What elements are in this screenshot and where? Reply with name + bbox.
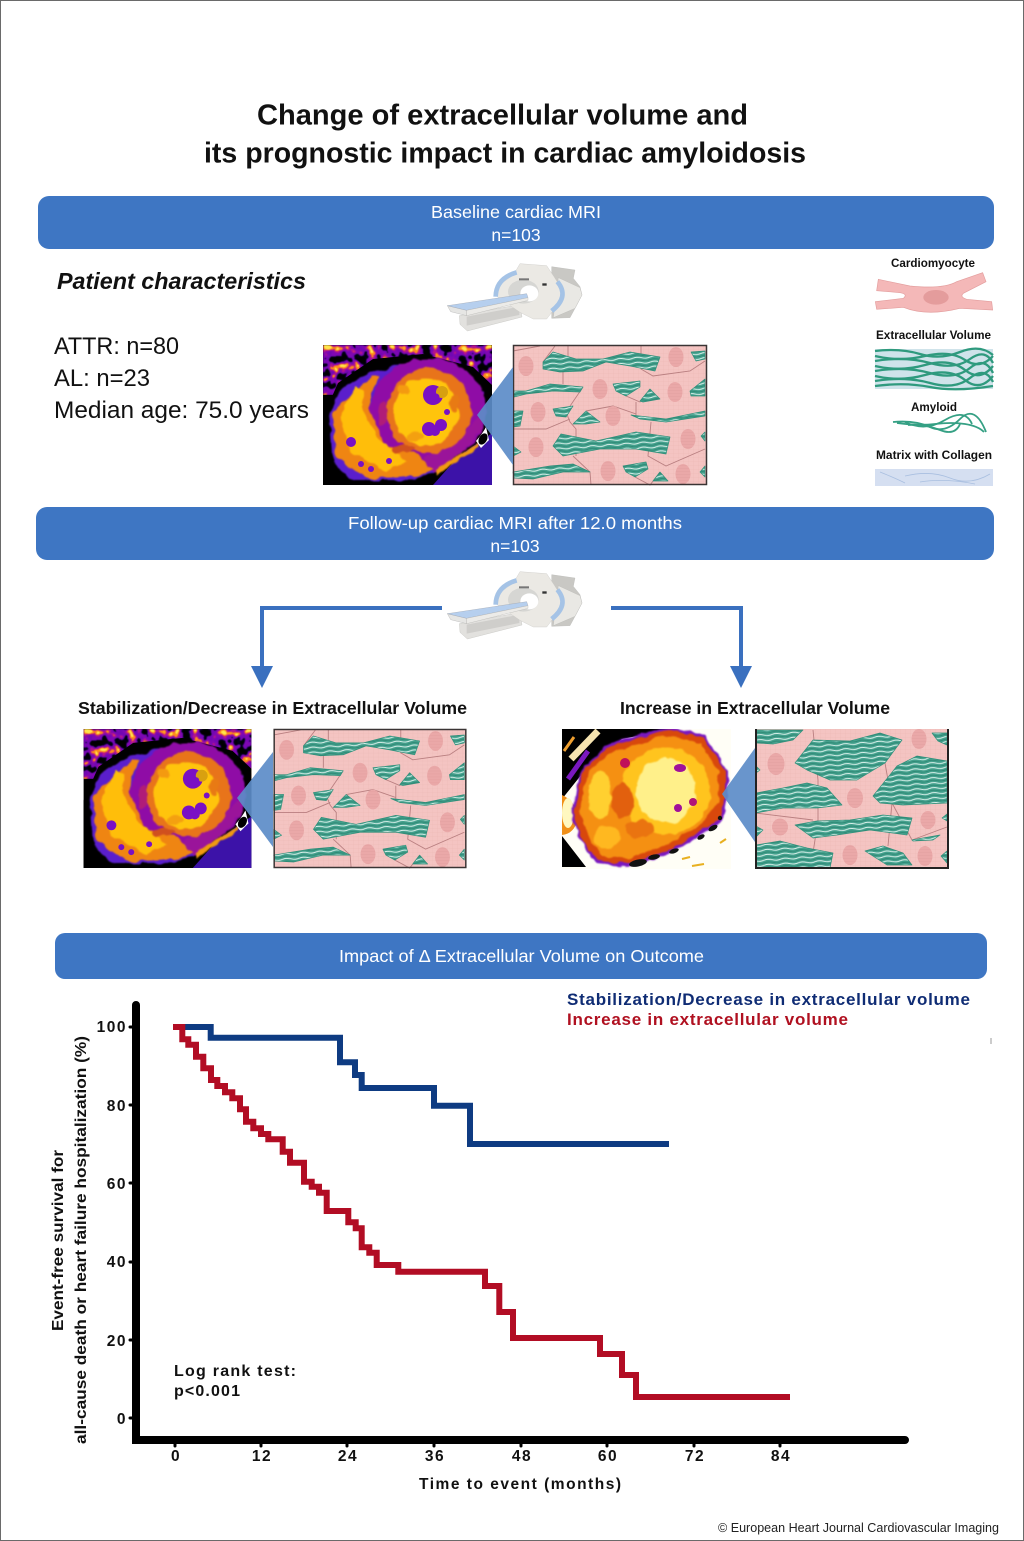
legend item: amyloid: Amyloid xyxy=(911,400,957,414)
zoom wedge baseline xyxy=(477,367,513,465)
title xyxy=(204,100,806,170)
banner: follow-up cardiac MRI xyxy=(36,507,994,560)
y axis tick labels: 20 xyxy=(107,1333,127,1350)
y axis title: Event-free survival for xyxy=(50,1150,67,1331)
heading: increase: Increase in Extracellular Volume xyxy=(620,698,890,718)
banner: follow-up cardiac MRI: n=103 xyxy=(490,536,540,556)
x axis tick labels: 0 xyxy=(171,1448,181,1465)
histology panel increase xyxy=(755,729,949,869)
MRI heart image baseline xyxy=(323,345,492,485)
chart: Kaplan-Meier survival xyxy=(50,990,970,1493)
title: its prognostic impact in cardiac amyloidosis xyxy=(204,138,806,170)
banner: baseline cardiac MRI: Baseline cardiac MRI xyxy=(431,202,601,222)
patient characteristics text: Median age: 75.0 years xyxy=(54,397,309,424)
arrow: to stabilization xyxy=(251,608,442,688)
chart legend xyxy=(567,990,970,1029)
y axis tick labels: 0 xyxy=(117,1411,127,1428)
banner: baseline cardiac MRI xyxy=(38,196,994,249)
heading: stabilization/decrease: Stabilization/Decrease in Extracellular Volume xyxy=(78,698,467,718)
patient characteristics heading: Patient characteristics xyxy=(57,268,306,294)
zoom wedge stabilization xyxy=(237,752,273,847)
y axis tick labels xyxy=(97,1019,127,1428)
banner: impact on outcome xyxy=(55,933,987,979)
y axis tick labels: 80 xyxy=(107,1098,127,1115)
legend item: amyloid xyxy=(893,400,986,432)
x axis tick labels: 60 xyxy=(598,1448,618,1465)
title: Change of extracellular volume and xyxy=(257,100,748,132)
chart legend: Increase in extracellular volume xyxy=(567,1010,848,1029)
histology panel stabilization xyxy=(274,729,466,868)
x axis tick labels: 24 xyxy=(338,1448,358,1465)
legend item: extracellular volume xyxy=(875,328,993,389)
copyright credit: © European Heart Journal Cardiovascular Imaging xyxy=(718,1521,999,1535)
x axis tick labels xyxy=(171,1448,791,1465)
patient characteristics text xyxy=(54,333,309,424)
curve: stabilization/decrease xyxy=(175,1027,669,1144)
arrow: to increase xyxy=(611,608,752,688)
legend item: matrix with collagen: Matrix with Collagen xyxy=(876,448,992,462)
y axis title xyxy=(50,1036,90,1444)
banner: follow-up cardiac MRI: Follow-up cardiac MRI after 12.0 months xyxy=(348,513,682,533)
MRI heart image stabilization xyxy=(84,729,251,868)
legend: tissue components xyxy=(875,256,993,486)
x axis tick labels: 12 xyxy=(252,1448,272,1465)
chart legend: Stabilization/Decrease in extracellular volume xyxy=(567,990,970,1009)
log rank annotation: p<0.001 xyxy=(174,1383,240,1400)
y axis tick labels: 100 xyxy=(97,1019,127,1036)
y axis tick labels: 60 xyxy=(107,1176,127,1193)
log rank annotation: Log rank test: xyxy=(174,1363,296,1380)
x axis tick labels: 48 xyxy=(512,1448,532,1465)
histology panel baseline xyxy=(513,345,707,485)
chart axes xyxy=(130,1005,905,1446)
icon: MRI scanner follow-up xyxy=(447,572,582,639)
banner: impact on outcome: Impact of Δ Extracellular Volume on Outcome xyxy=(339,946,704,966)
zoom wedge increase xyxy=(722,748,755,842)
x axis title: Time to event (months) xyxy=(419,1476,621,1493)
x axis tick labels: 36 xyxy=(425,1448,445,1465)
patient characteristics text: AL: n=23 xyxy=(54,365,150,392)
log rank annotation xyxy=(174,1363,296,1400)
curve: increase xyxy=(173,1027,790,1397)
legend item: matrix with collagen xyxy=(875,448,993,486)
legend item: extracellular volume: Extracellular Volume xyxy=(876,328,991,342)
icon: MRI scanner baseline xyxy=(447,264,582,331)
legend item: cardiomyocyte xyxy=(875,256,993,312)
MRI heart image increase xyxy=(562,729,731,869)
x axis tick labels: 84 xyxy=(771,1448,791,1465)
y axis tick labels: 40 xyxy=(107,1254,127,1271)
patient characteristics text: ATTR: n=80 xyxy=(54,333,179,360)
banner: baseline cardiac MRI: n=103 xyxy=(491,225,541,245)
legend item: cardiomyocyte: Cardiomyocyte xyxy=(891,256,975,270)
y axis title: all-cause death or heart failure hospitalization (%) xyxy=(73,1036,90,1444)
x axis tick labels: 72 xyxy=(685,1448,705,1465)
